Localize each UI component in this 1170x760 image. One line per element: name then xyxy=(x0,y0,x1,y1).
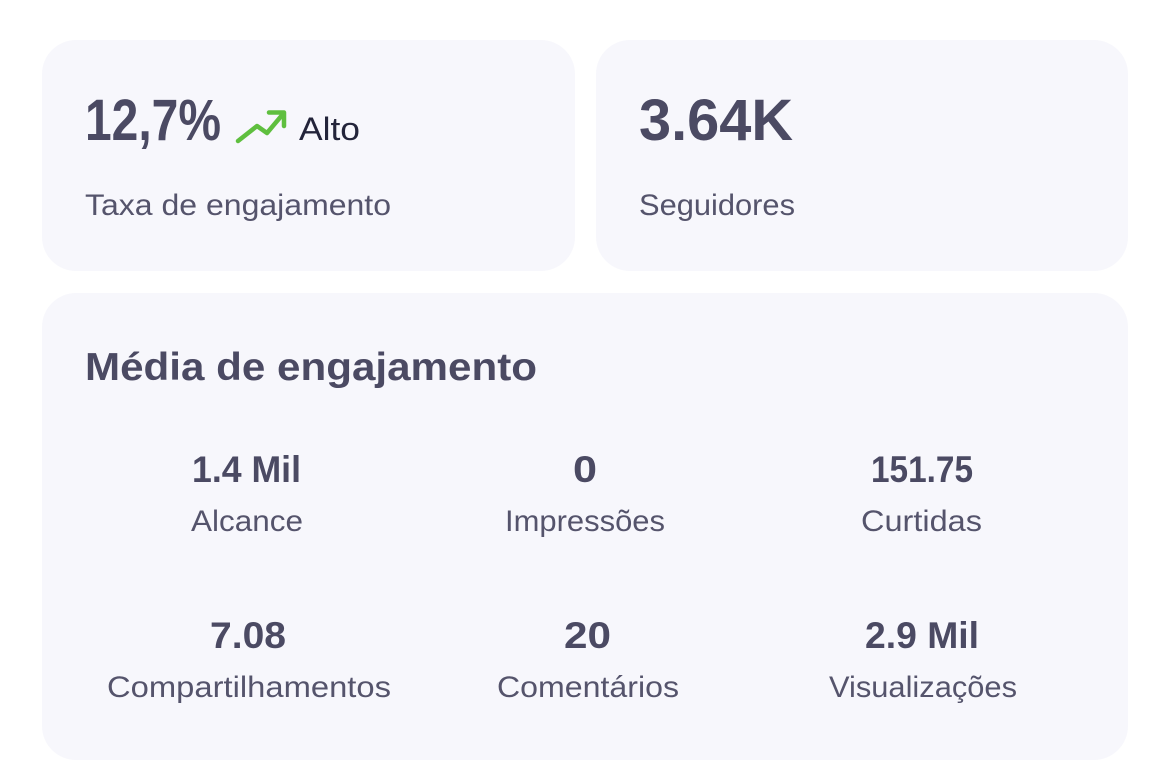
metric: comentários xyxy=(497,615,679,704)
metric: alcance xyxy=(191,449,303,538)
metric: alcance: 1.4 Mil xyxy=(192,449,301,490)
status label: Alto xyxy=(299,111,360,147)
caption: seguidores: Seguidores xyxy=(639,189,795,222)
value: seguidores: 3.64K xyxy=(639,88,793,153)
metric: comentários: 20 xyxy=(564,615,611,656)
metric: alcance: Alcance xyxy=(191,505,303,538)
metric: comentários: Comentários xyxy=(497,671,679,704)
metric: curtidas: Curtidas xyxy=(861,505,982,538)
icon: trending up arrow xyxy=(238,112,284,141)
panel: taxa de engajamento xyxy=(42,40,575,271)
metric: compartilhamentos: Compartilhamentos xyxy=(107,671,391,704)
metric: curtidas xyxy=(861,449,982,538)
metric: compartilhamentos xyxy=(107,615,391,704)
caption: taxa de engajamento: Taxa de engajamento xyxy=(85,189,391,222)
metric: visualizações: 2.9 Mil xyxy=(865,615,979,656)
panel: média de engajamento xyxy=(42,293,1128,760)
metric: compartilhamentos: 7.08 xyxy=(210,615,286,656)
metric: impressões: Impressões xyxy=(505,505,665,538)
metric: visualizações: Visualizações xyxy=(829,671,1017,704)
metric: impressões: 0 xyxy=(573,449,597,490)
metric: curtidas: 151.75 xyxy=(871,449,973,490)
metric: visualizações xyxy=(829,615,1017,704)
metric: impressões xyxy=(505,449,665,538)
panel: seguidores xyxy=(596,40,1128,271)
heading: Média de engajamento xyxy=(85,346,537,389)
value: taxa de engajamento: 12,7% xyxy=(85,88,221,153)
